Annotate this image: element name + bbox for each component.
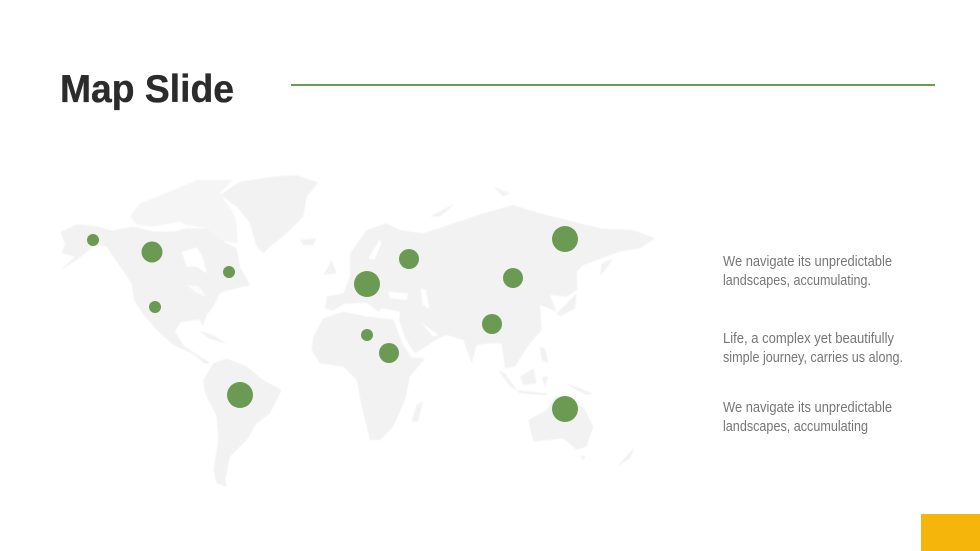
title: Map Slide	[60, 68, 234, 111]
text block 1: landscapes, accumulating.	[723, 272, 871, 289]
text block 3: We navigate its unpredictable	[723, 399, 892, 416]
world map	[60, 175, 655, 487]
corner accent	[921, 514, 980, 551]
text block 2	[723, 330, 903, 366]
text block 3: landscapes, accumulating	[723, 418, 868, 435]
text block 1: We navigate its unpredictable	[723, 253, 892, 270]
americas and greenland	[60, 175, 337, 487]
great lakes	[187, 285, 207, 297]
header rule	[291, 84, 935, 86]
text block 2: Life, a complex yet beautifully	[723, 330, 894, 347]
text block 2: simple journey, carries us along.	[723, 349, 903, 366]
data markers	[87, 226, 578, 422]
eurasia africa and oceania	[312, 187, 655, 467]
hudson bay	[182, 247, 207, 273]
text block 1	[723, 253, 892, 289]
text block 3	[723, 399, 892, 435]
